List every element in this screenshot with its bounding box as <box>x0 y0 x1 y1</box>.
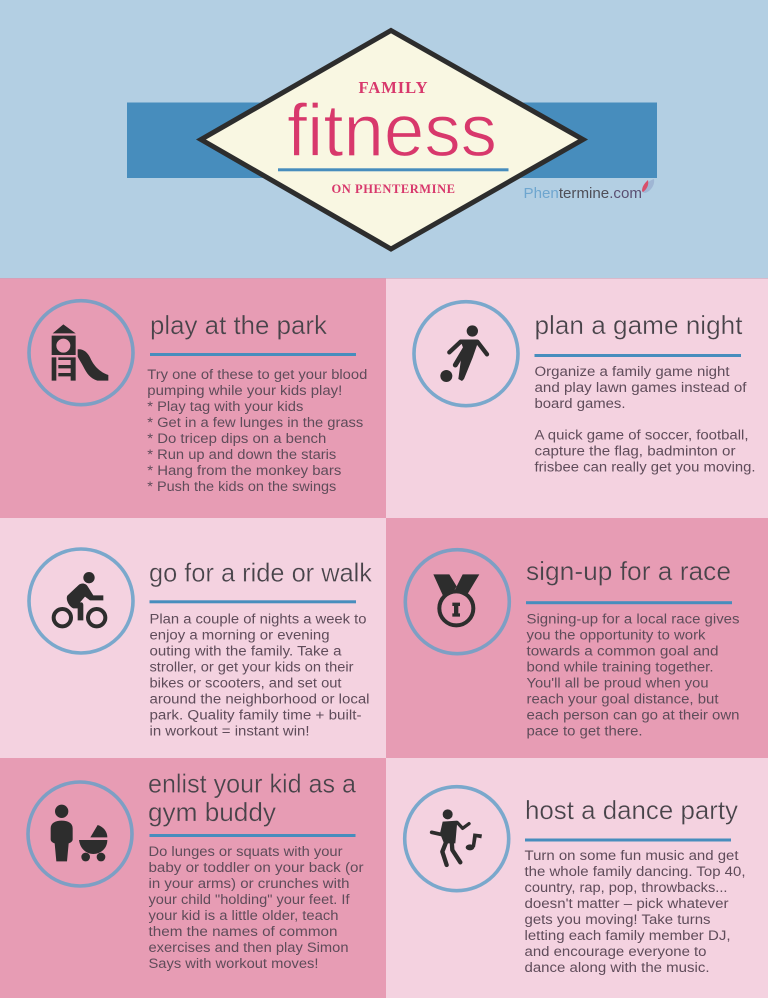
body text: them the names of common <box>148 924 338 939</box>
body text: enjoy a morning or evening <box>150 628 330 642</box>
body text: exercises and then play Simon <box>148 940 348 955</box>
icon: playground slide <box>52 324 108 381</box>
body text: * Run up and down the staris <box>147 447 337 462</box>
body text <box>524 848 746 975</box>
body text: country, rap, pop, throwbacks... <box>524 880 728 895</box>
heading rule <box>150 600 356 603</box>
body text: A quick game of soccer, football, <box>534 428 748 442</box>
body text: Try one of these to get your blood <box>147 367 367 382</box>
body text: * Hang from the monkey bars <box>147 463 342 478</box>
icon: dancer with music note <box>432 809 482 865</box>
heading rule <box>534 354 741 357</box>
body text: board games. <box>534 396 626 411</box>
panel: play at the park <box>0 278 386 518</box>
heading: play at the park <box>150 310 328 340</box>
body text: You'll all be proud when you <box>526 676 708 690</box>
title diamond badge <box>201 30 583 249</box>
heading rule <box>525 838 731 842</box>
body text: Do lunges or squats with your <box>148 844 343 859</box>
heading: go for a ride or walk <box>149 558 373 588</box>
body text: capture the flag, badminton or <box>534 444 736 458</box>
body text <box>148 844 364 971</box>
panel: plan a game night <box>386 278 768 518</box>
body text: your kid is a little older, teach <box>148 908 338 923</box>
body text <box>534 364 756 474</box>
body text: and encourage everyone to <box>524 944 706 959</box>
body text: bikes or scooters, and set out <box>150 676 342 690</box>
heading <box>148 768 357 827</box>
body text: * Get in a few lunges in the grass <box>147 415 364 430</box>
body text: pumping while your kids play! <box>147 383 342 398</box>
body text: and play lawn games instead of <box>534 380 747 395</box>
heading rule <box>150 353 356 356</box>
body text: * Play tag with your kids <box>147 399 304 414</box>
icon ring: medal <box>405 550 509 654</box>
body text: dance along with the music. <box>524 960 710 975</box>
icon ring: dancer <box>405 787 509 891</box>
body text: stroller, or get your kids on their <box>150 660 354 674</box>
body text: in your arms) or crunches with <box>148 876 350 891</box>
body text: * Push the kids on the swings <box>147 479 337 494</box>
body text: Organize a family game night <box>534 364 730 379</box>
heading: host a dance party <box>525 795 738 825</box>
icon ring: soccer <box>414 302 518 406</box>
logo: phentermine.com: Phentermine.com <box>524 185 642 202</box>
panel: enlist your kid as a gym buddy <box>0 758 386 998</box>
icon ring: playground <box>29 301 133 405</box>
body text: outing with the family. Take a <box>150 644 342 658</box>
header background <box>0 0 768 278</box>
icon: medal <box>433 574 479 625</box>
body text: you the opportunity to work <box>526 628 706 642</box>
body text: park. Quality family time + built- <box>150 708 362 722</box>
heading: plan a game night <box>534 310 743 340</box>
body text: reach your goal distance, but <box>526 692 719 706</box>
icon ring: bicycle <box>29 549 133 653</box>
heading rule <box>526 601 732 604</box>
heading: sign-up for a race <box>526 556 731 586</box>
body text: baby or toddler on your back (or <box>148 860 364 875</box>
body text <box>526 612 740 738</box>
body text: gets you moving! Take turns <box>524 912 711 927</box>
body text: letting each family member DJ, <box>524 928 730 943</box>
body text: Turn on some fun music and get <box>524 848 739 863</box>
body text: your child "holding" your feet. If <box>148 892 350 907</box>
body text: * Do tricep dips on a bench <box>147 431 326 446</box>
icon: cyclist <box>54 572 105 626</box>
panel: sign-up for a race <box>386 518 768 758</box>
body text: in workout = instant win! <box>150 724 310 738</box>
body text: Signing-up for a local race gives <box>526 612 740 626</box>
body text: the whole family dancing. Top 40, <box>524 864 746 879</box>
body text: frisbee can really get you moving. <box>534 460 756 474</box>
body text: bond while training together. <box>526 660 714 674</box>
logo: phentermine.com <box>524 179 654 202</box>
body text: around the neighborhood or local <box>150 692 370 706</box>
icon: parent and stroller <box>51 805 107 861</box>
body text: doesn't matter – pick whatever <box>524 896 729 911</box>
title: on phentermine: ON PHENTERMINE <box>332 182 455 196</box>
heading: enlist your kid as a <box>148 768 357 798</box>
heading rule <box>150 834 356 837</box>
icon ring: parent and stroller <box>28 782 132 886</box>
body text <box>150 612 370 738</box>
title: family: FAMILY <box>358 78 428 97</box>
title rule <box>278 168 508 171</box>
icon: soccer player <box>440 325 487 382</box>
panel: host a dance party <box>386 758 768 998</box>
body text: pace to get there. <box>526 724 642 738</box>
body text: each person can go at their own <box>526 708 740 722</box>
title: fitness: fitness <box>287 89 497 172</box>
heading: gym buddy <box>148 797 276 827</box>
panel: go for a ride or walk <box>0 518 386 758</box>
body text <box>147 367 367 494</box>
body text: Says with workout moves! <box>148 956 318 971</box>
body text: Plan a couple of nights a week to <box>150 612 366 626</box>
body text: towards a common goal and <box>526 644 718 658</box>
title band <box>127 102 657 178</box>
